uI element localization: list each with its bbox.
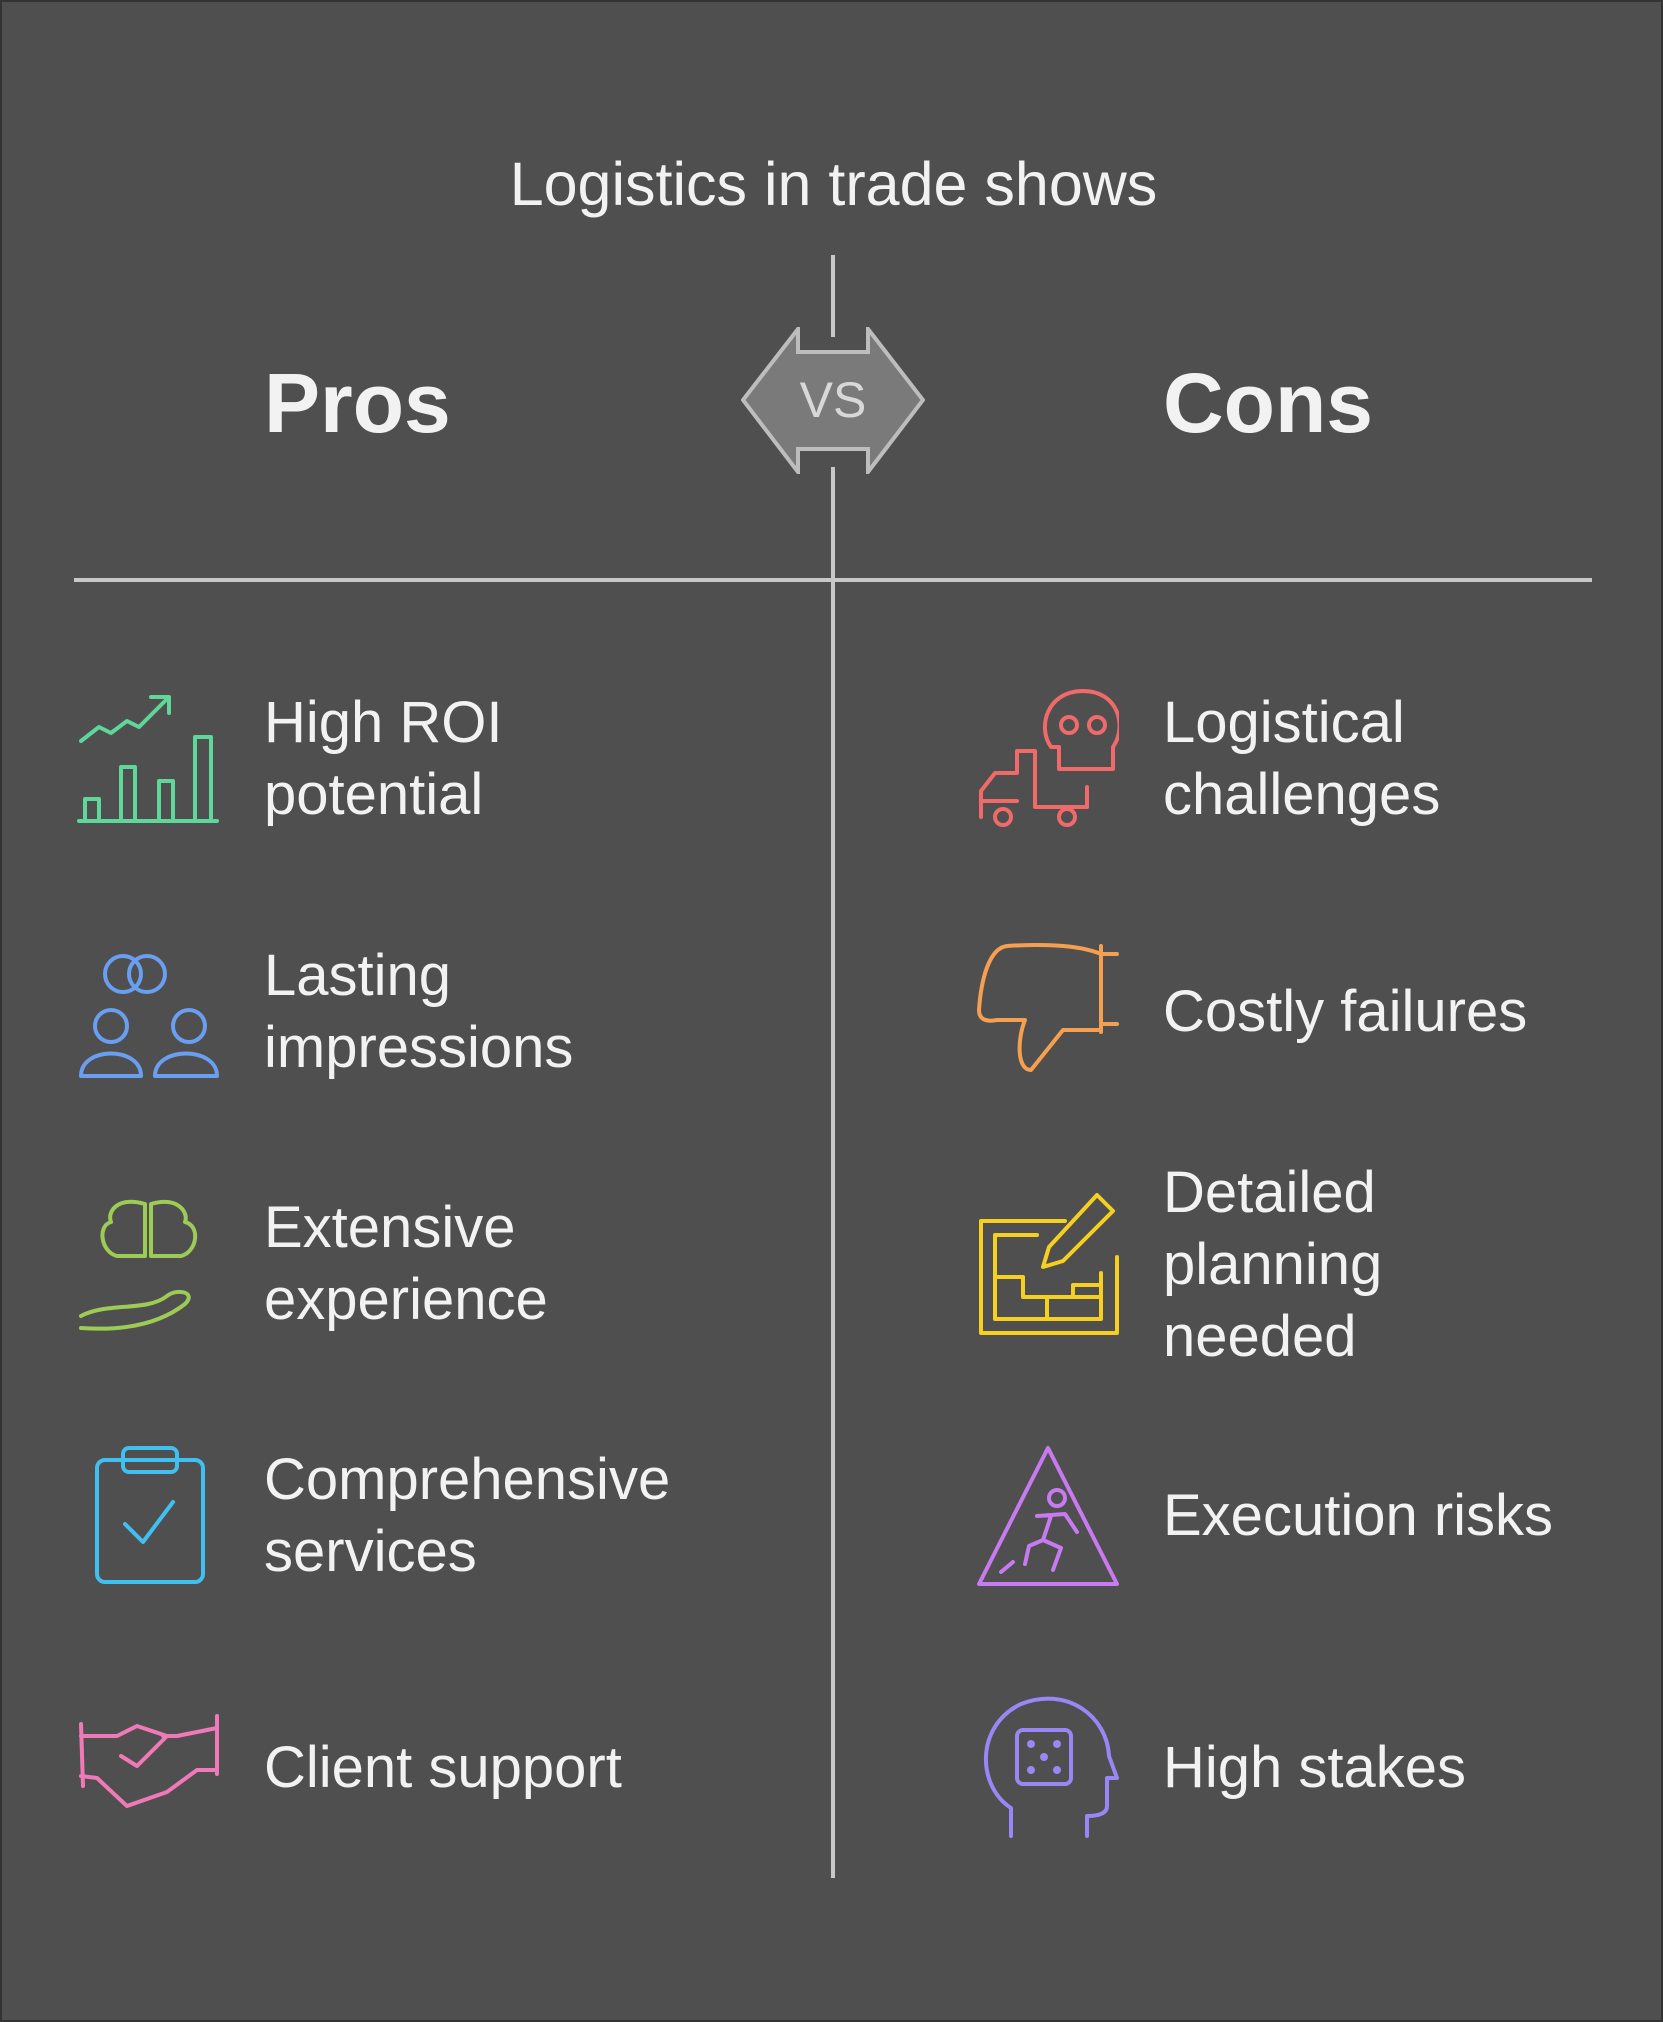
pro 1: High ROI: potential — [264, 762, 483, 827]
heading: Pros: Pros — [264, 356, 451, 450]
con 1: Logistical challenges — [979, 689, 1440, 827]
con 5: High stakes: High stakes — [1163, 1735, 1466, 1800]
icon: chart — [77, 695, 219, 823]
icon: clipboard — [95, 1446, 205, 1584]
pro 2: Lasting impressions — [79, 943, 573, 1080]
con 2: Costly failures — [977, 943, 1527, 1072]
pro 5: Client support: Client support — [264, 1735, 622, 1800]
pro 4: Comprehensive services — [95, 1446, 670, 1584]
pro 1: High ROI — [77, 690, 503, 827]
pro 3: Extensive experience: experience — [264, 1267, 548, 1332]
pro 5: Client support — [79, 1714, 622, 1808]
con 3: Detailed planning needed: Detailed — [1163, 1160, 1376, 1225]
icon: blueprint pencil — [979, 1193, 1119, 1335]
title: Logistics in trade shows — [510, 150, 1157, 218]
con 3: Detailed planning needed — [979, 1160, 1382, 1369]
icon: people — [79, 954, 219, 1078]
pro 3: Extensive experience — [78, 1195, 548, 1332]
con 3: Detailed planning needed: needed — [1163, 1304, 1357, 1369]
icon: truck skull — [979, 689, 1119, 827]
con 4: Execution risks — [977, 1446, 1553, 1586]
con 2: Costly failures: Costly failures — [1163, 979, 1527, 1044]
con 3: Detailed planning needed: planning — [1163, 1232, 1382, 1297]
icon: brain hand — [78, 1200, 198, 1331]
con 4: Execution risks: Execution risks — [1163, 1483, 1553, 1548]
pro 2: Lasting impressions: Lasting — [264, 943, 451, 1008]
pro 4: Comprehensive services: services — [264, 1519, 477, 1584]
heading: Cons: Cons — [1163, 356, 1373, 450]
pro 3: Extensive experience: Extensive — [264, 1195, 515, 1260]
pro 4: Comprehensive services: Comprehensive — [264, 1447, 670, 1512]
icon: head dice — [984, 1696, 1119, 1838]
con 1: Logistical challenges: challenges — [1163, 762, 1440, 827]
pro 2: Lasting impressions: impressions — [264, 1015, 573, 1080]
pro 1: High ROI: High ROI — [264, 690, 503, 755]
con 1: Logistical challenges: Logistical — [1163, 690, 1405, 755]
vs badge — [741, 327, 925, 474]
vs badge: VS — [800, 372, 866, 428]
con 5: High stakes — [984, 1696, 1466, 1838]
icon: handshake — [79, 1714, 219, 1808]
icon: thumbs down — [977, 943, 1119, 1072]
icon: warning triangle — [977, 1446, 1119, 1586]
